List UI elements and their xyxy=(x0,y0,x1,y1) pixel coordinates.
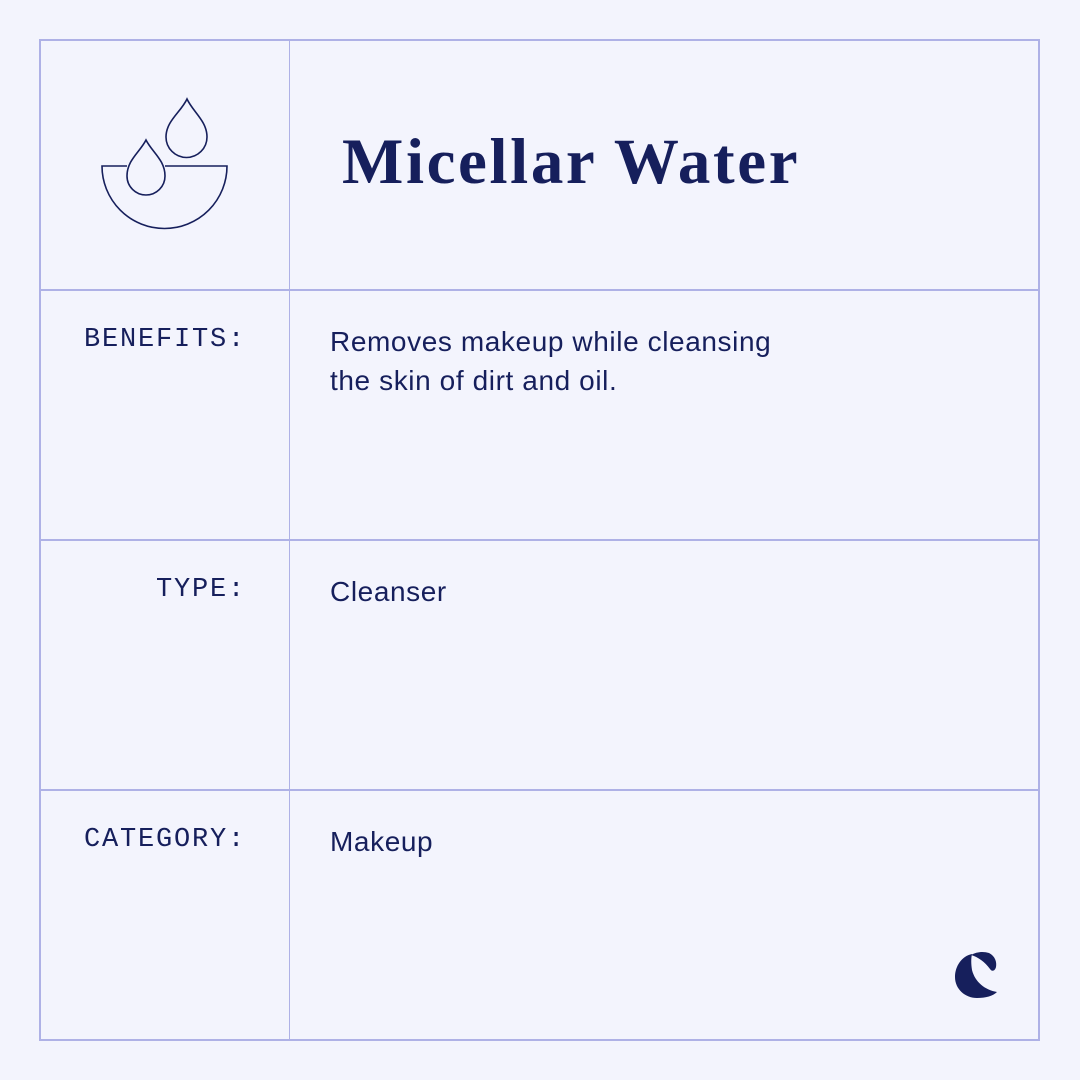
title: Micellar Water xyxy=(342,126,800,198)
text: type: Cleanser xyxy=(330,576,447,607)
text: benefits: the skin of dirt and oil. xyxy=(330,365,617,396)
label: category: CATEGORY: xyxy=(84,825,246,855)
text: category: Makeup xyxy=(330,826,433,857)
text: benefits: Removes makeup while cleansing xyxy=(330,326,771,357)
icon: bowl with water drops xyxy=(101,97,228,230)
label: benefits: BENEFITS: xyxy=(84,325,246,355)
label: type: TYPE: xyxy=(156,575,246,605)
text: benefits xyxy=(330,326,771,396)
